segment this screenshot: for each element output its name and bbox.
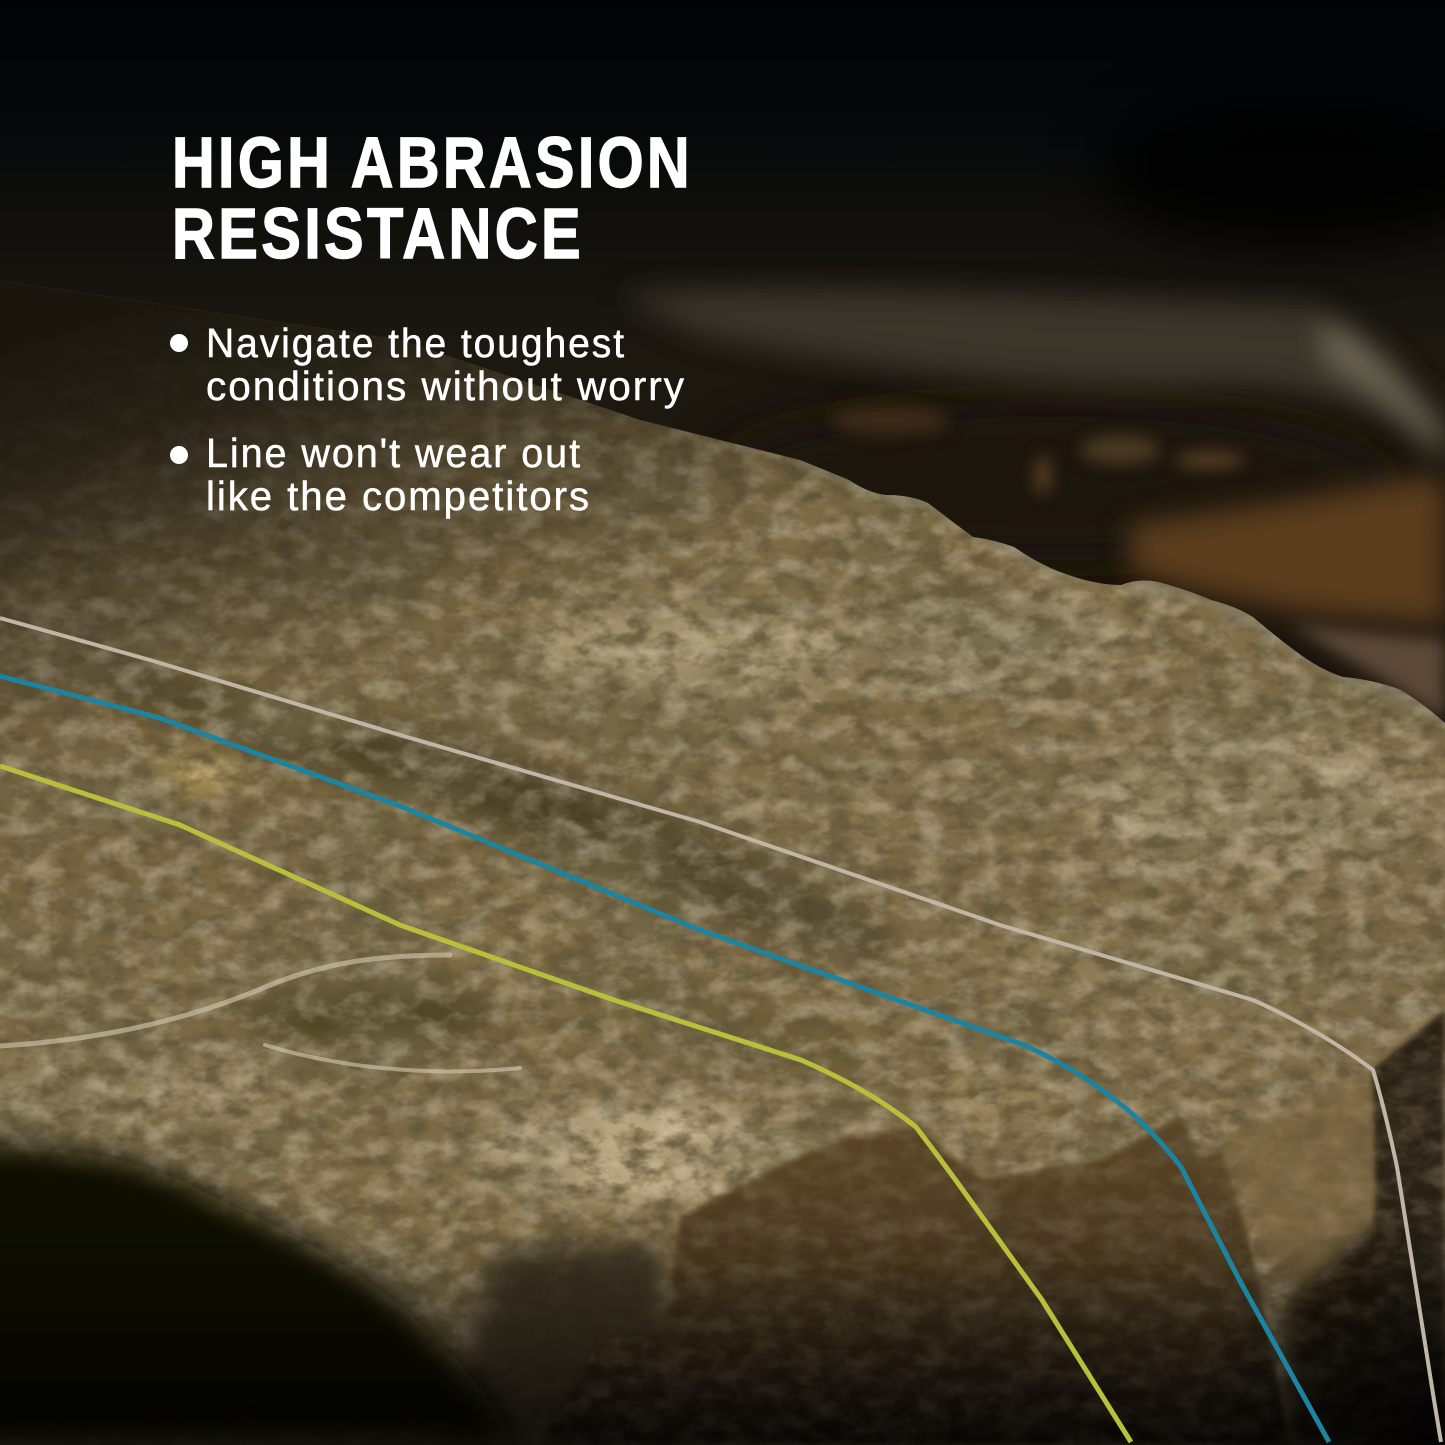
pale mineral veins [0,955,520,1071]
bullet one [170,320,686,409]
title: RESISTANCE [172,195,584,274]
tonal patches on rock [0,580,1420,1200]
bullet two: Line won't wear out [206,430,582,476]
fishing line: white [0,618,1441,1442]
fishing line: yellow-green [0,766,1131,1442]
bullet one: conditions without worry [206,363,686,409]
bullet two: like the competitors [206,473,591,519]
title [172,124,693,274]
front face texture [548,1018,1445,1444]
bullet two [170,430,591,519]
bottom vignette [0,1230,1445,1445]
shaded lower right face [1281,1215,1380,1445]
front face of rock [540,1117,1290,1445]
right side dark face [1373,1010,1445,1445]
fishing line: blue [0,676,1329,1442]
soft shadow at lower left of front edge [440,1240,680,1445]
corner vignette [1262,1212,1445,1445]
bullet one: Navigate the toughest [206,320,626,366]
title: HIGH ABRASION [172,124,693,203]
blurred background rocks [620,90,1445,720]
bullet list [170,320,686,519]
upper fade over rock [0,280,844,740]
rock surface texture [0,384,1445,1315]
left shadow under rock [0,1140,520,1445]
lit patch on right of front face [1232,1080,1378,1282]
rim along rock edge [800,460,1445,723]
